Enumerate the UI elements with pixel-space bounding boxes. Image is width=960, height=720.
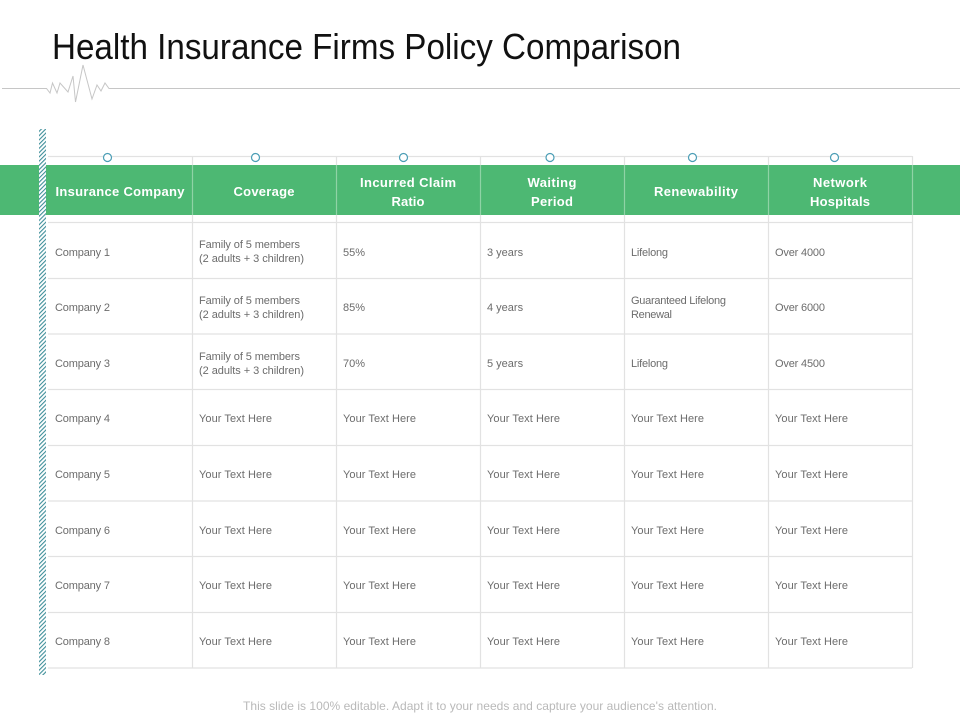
title: Health Insurance Firms Policy Comparison [52,26,681,67]
row: Company 7: Your Text Here [199,580,272,592]
row: Company 4 [55,413,848,425]
row: Company 3: 5 years [487,358,524,370]
row: Company 6: Your Text Here [343,525,416,537]
row: Company 4: Your Text Here [775,413,848,425]
row: Company 6 [55,525,848,537]
header markers [104,154,838,162]
row: Company 5: Company 5 [55,469,110,481]
row: Company 8: Company 8 [55,636,110,648]
row: Company 8 [55,636,848,648]
row: Company 3: Company 3 [55,358,110,370]
table header labels: Incurred Claim [360,175,456,190]
row: Company 4: Your Text Here [199,413,272,425]
row: Company 3: Family of 5 members [199,351,300,363]
table header labels: Network [813,175,868,190]
row: Company 6: Your Text Here [199,525,272,537]
row: Company 6: Your Text Here [487,525,560,537]
row: Company 1 [55,239,825,265]
row: Company 1: Company 1 [55,247,110,259]
row: Company 5: Your Text Here [775,469,848,481]
row: Company 8: Your Text Here [343,636,416,648]
row: Company 7: Your Text Here [631,580,704,592]
hatched vertical strip [39,129,46,675]
row: Company 4: Your Text Here [631,413,704,425]
row: Company 1: 55% [343,247,365,259]
row: Company 5: Your Text Here [631,469,704,481]
row: Company 7: Your Text Here [487,580,560,592]
row: Company 8: Your Text Here [487,636,560,648]
row: Company 2: Over 6000 [775,302,825,314]
table header labels: Ratio [392,194,425,209]
table header labels: Period [531,194,573,209]
table grid [48,156,912,668]
row: Company 2: (2 adults + 3 children) [199,309,304,321]
row: Company 2: 85% [343,302,365,314]
row: Company 8: Your Text Here [199,636,272,648]
table header labels: Coverage [234,184,294,199]
row: Company 7: Company 7 [55,580,110,592]
row: Company 1: Over 4000 [775,247,825,259]
row: Company 2 [55,295,825,321]
row: Company 8: Your Text Here [631,636,704,648]
row: Company 3: 70% [343,358,365,370]
row: Company 8: Your Text Here [775,636,848,648]
row: Company 4: Your Text Here [343,413,416,425]
row: Company 1: 3 years [487,247,524,259]
row: Company 3: (2 adults + 3 children) [199,365,304,377]
row: Company 2: Company 2 [55,302,110,314]
row: Company 2: Guaranteed Lifelong [631,295,726,307]
row: Company 1: Lifelong [631,247,668,259]
footer note: This slide is 100% editable. Adapt it to your needs and capture your audience's attention. [243,699,717,713]
row: Company 3 [55,351,825,377]
row: Company 5 [55,469,848,481]
row: Company 1: Family of 5 members [199,239,300,251]
row: Company 6: Your Text Here [631,525,704,537]
row: Company 1: (2 adults + 3 children) [199,253,304,265]
row: Company 4: Company 4 [55,413,110,425]
row: Company 5: Your Text Here [343,469,416,481]
row: Company 2: 4 years [487,302,524,314]
table header labels: Insurance Company [56,184,185,199]
row: Company 3: Over 4500 [775,358,825,370]
row: Company 5: Your Text Here [199,469,272,481]
green header band [0,165,960,215]
table header labels: Renewability [654,184,739,199]
row: Company 2: Family of 5 members [199,295,300,307]
table header labels [56,175,870,209]
row: Company 7: Your Text Here [343,580,416,592]
row: Company 6: Your Text Here [775,525,848,537]
row: Company 4: Your Text Here [487,413,560,425]
row: Company 3: Lifelong [631,358,668,370]
row: Company 6: Company 6 [55,525,110,537]
row: Company 5: Your Text Here [487,469,560,481]
icon: heartbeat line [2,65,960,102]
table header labels: Hospitals [810,194,870,209]
table header labels: Waiting [528,175,577,190]
row: Company 7 [55,580,848,592]
row: Company 2: Renewal [631,309,672,321]
row: Company 7: Your Text Here [775,580,848,592]
